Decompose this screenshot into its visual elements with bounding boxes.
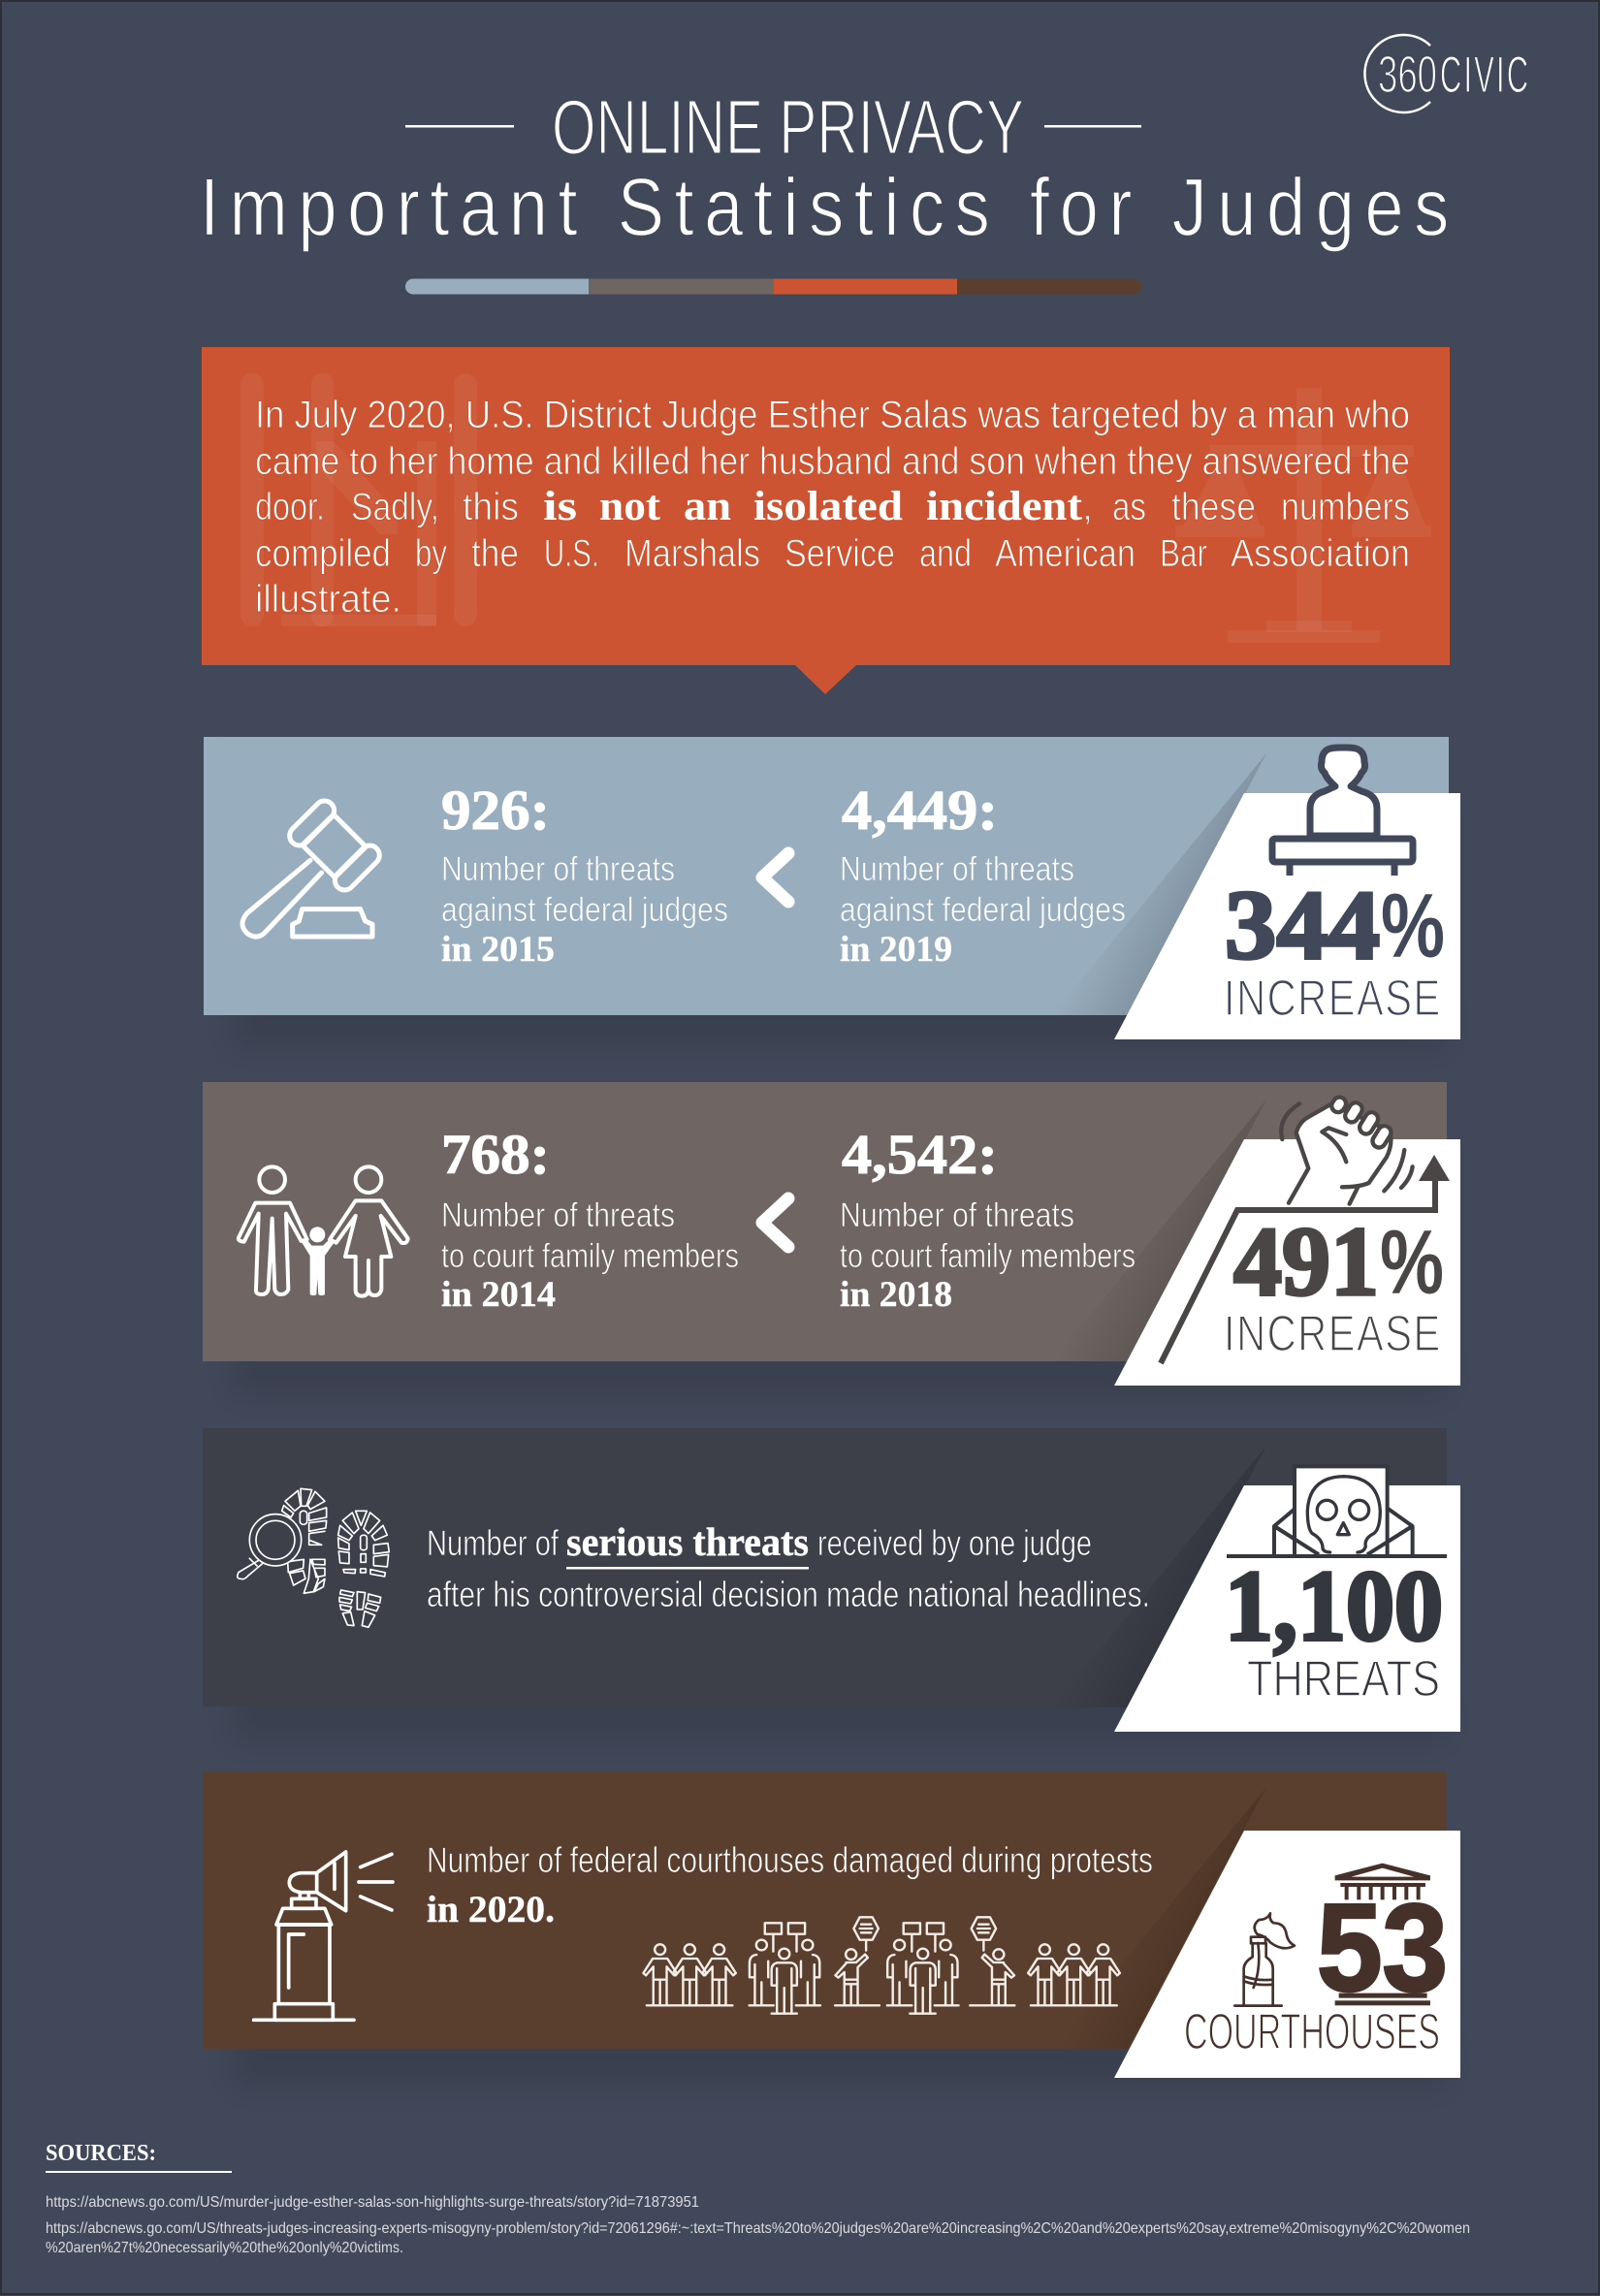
- icon: family: [239, 1166, 408, 1296]
- stat: 4,449 in 2019: [840, 779, 1126, 970]
- text: serious threats statement: [427, 1519, 1150, 1614]
- intro paragraph: compiled: [255, 532, 391, 575]
- text: courthouses statement: in 2020.: [427, 1889, 555, 1930]
- tag: 53 courthouses: COURTHOUSES: [1184, 2004, 1440, 2060]
- arrow line: [1161, 1155, 1450, 1363]
- stat: 926 in 2015: Number of threats: [441, 850, 675, 888]
- intro paragraph: Service: [784, 532, 895, 575]
- stat: 4,542 in 2018: in 2018: [840, 1275, 952, 1315]
- intro paragraph: isolated: [753, 484, 903, 529]
- stat: 4,542 in 2018: 4,542:: [842, 1123, 998, 1186]
- panel: threats against federal judges: [204, 737, 1460, 1039]
- stat: 926 in 2015: [441, 779, 728, 970]
- intro paragraph: In July 2020, U.S. District Judge Esther Salas was targeted by a man who: [255, 394, 1410, 436]
- icon: raised fist: [1281, 1095, 1413, 1204]
- stat: 926 in 2015: in 2015: [441, 930, 555, 970]
- stat: 4,449 in 2019: Number of threats: [840, 850, 1074, 888]
- text: serious threats statement: received by one judge: [817, 1523, 1092, 1563]
- sources: https://abcnews.go.com/US/threats-judges-increasing-experts-misogyny-problem/story?id=72061296#:~:text=Threats%20to%20judges%20are%20increasing%2C%20and%20experts%20say,extreme%20misogyny%2C%20women: [46, 2220, 1470, 2237]
- logo: 360 Civic: 360: [1378, 46, 1437, 104]
- tag: 344% increase: 344: [1225, 871, 1380, 980]
- intro paragraph: U.S.: [544, 532, 599, 575]
- sources: https://abcnews.go.com/US/murder-judge-esther-salas-son-highlights-surge-threats/story?id=71873951: [46, 2194, 699, 2211]
- title: ONLINE PRIVACY: [552, 83, 1024, 171]
- drop shadows below rows: [233, 999, 1445, 2087]
- intro paragraph: Marshals: [624, 532, 760, 575]
- stat: 768 in 2014: [441, 1123, 739, 1315]
- tag: 344% increase: %: [1381, 875, 1445, 976]
- tag: 53 courthouses: [1114, 1831, 1460, 2078]
- tag: 344% increase: [1114, 748, 1460, 1039]
- stat: 4,449 in 2019: 4,449:: [842, 779, 998, 842]
- icon: courthouse: [1335, 1864, 1430, 2005]
- colour bar divider: [405, 279, 1141, 295]
- title: Important Statistics for Judges: [200, 161, 1449, 253]
- icon: judge at bench: [1272, 748, 1413, 876]
- icon: air horn: [254, 1852, 393, 2020]
- intro paragraph: incident: [926, 484, 1083, 529]
- intro paragraph: these: [1171, 486, 1256, 528]
- intro paragraph: American: [995, 532, 1136, 575]
- tag: 1,100 threats: [1114, 1466, 1460, 1732]
- tag: 491% increase: %: [1380, 1211, 1444, 1313]
- icon: magnifier and boot prints: [238, 1488, 389, 1627]
- panel: intro callout: [202, 347, 1450, 694]
- intro paragraph: and: [919, 532, 972, 575]
- chevron: less than: [762, 1198, 788, 1247]
- intro paragraph: came to her home and killed her husband and son when they answered the: [255, 440, 1410, 483]
- intro paragraph: an: [684, 484, 731, 529]
- text: serious threats statement: serious threats: [566, 1519, 809, 1564]
- intro paragraph: Bar: [1160, 532, 1207, 575]
- intro paragraph: ,: [1082, 486, 1093, 528]
- tag: 491% increase: 491: [1233, 1207, 1379, 1317]
- intro paragraph: by: [415, 532, 447, 575]
- panel: courthouses damaged: [203, 1771, 1460, 2078]
- icon: protest crowd: [643, 1917, 1120, 2014]
- icon: skull letter in envelope: [1274, 1466, 1413, 1556]
- sources: [46, 2141, 1470, 2256]
- stat: 4,542 in 2018: [840, 1123, 1136, 1315]
- intro paragraph: numbers: [1281, 486, 1410, 528]
- text: serious threats statement: after his controversial decision made national headlines.: [427, 1575, 1150, 1614]
- sources: SOURCES:: [46, 2141, 156, 2166]
- intro paragraph: [255, 394, 1410, 621]
- text: courthouses statement: Number of federal courthouses damaged during protests: [427, 1840, 1153, 1880]
- chevron: less than: [762, 853, 788, 902]
- title: [200, 83, 1449, 253]
- stat: 4,449 in 2019: against federal judges: [840, 891, 1126, 929]
- intro paragraph: illustrate.: [255, 578, 401, 621]
- intro paragraph: Sadly,: [351, 486, 439, 528]
- stat: 926 in 2015: against federal judges: [441, 891, 728, 929]
- stat: 4,542 in 2018: to court family members: [840, 1237, 1136, 1275]
- logo: 360 Civic: CIVIC: [1440, 48, 1528, 104]
- intro paragraph: is: [543, 484, 577, 529]
- intro paragraph: not: [599, 484, 661, 529]
- stat: 4,542 in 2018: Number of threats: [840, 1196, 1074, 1234]
- intro paragraph: as: [1112, 486, 1146, 528]
- tag: 491% increase: INCREASE: [1224, 1305, 1440, 1361]
- logo: 360 Civic: [1364, 35, 1528, 112]
- panel: threats to court family members: [203, 1082, 1460, 1386]
- sources: %20aren%27t%20necessarily%20the%20only%20victims.: [46, 2240, 403, 2256]
- watermark icons: [240, 373, 1431, 643]
- stat: 768 in 2014: 768:: [441, 1123, 550, 1186]
- tag: 1,100 threats: 1,100: [1225, 1550, 1443, 1662]
- text: serious threats statement: Number of: [427, 1523, 560, 1563]
- stat: 768 in 2014: Number of threats: [441, 1196, 675, 1234]
- stat: 926 in 2015: 926:: [441, 779, 550, 842]
- panel: serious threats: [203, 1428, 1460, 1732]
- icon: gavel: [242, 797, 383, 937]
- tag: 491% increase: [1114, 1095, 1460, 1386]
- tag: 53 courthouses: 53: [1317, 1879, 1448, 2018]
- intro paragraph: the: [471, 532, 519, 575]
- tag: 1,100 threats: THREATS: [1247, 1651, 1440, 1707]
- stat: 768 in 2014: to court family members: [441, 1237, 739, 1275]
- stat: 768 in 2014: in 2014: [441, 1275, 556, 1315]
- text: courthouses statement: [427, 1840, 1153, 1930]
- intro paragraph: door.: [255, 486, 325, 528]
- tag: 344% increase: INCREASE: [1224, 970, 1440, 1026]
- stat: 4,449 in 2019: in 2019: [840, 930, 952, 970]
- icon: molotov bottle: [1234, 1913, 1295, 2006]
- intro paragraph: this: [463, 486, 519, 528]
- intro paragraph: Association: [1231, 532, 1410, 575]
